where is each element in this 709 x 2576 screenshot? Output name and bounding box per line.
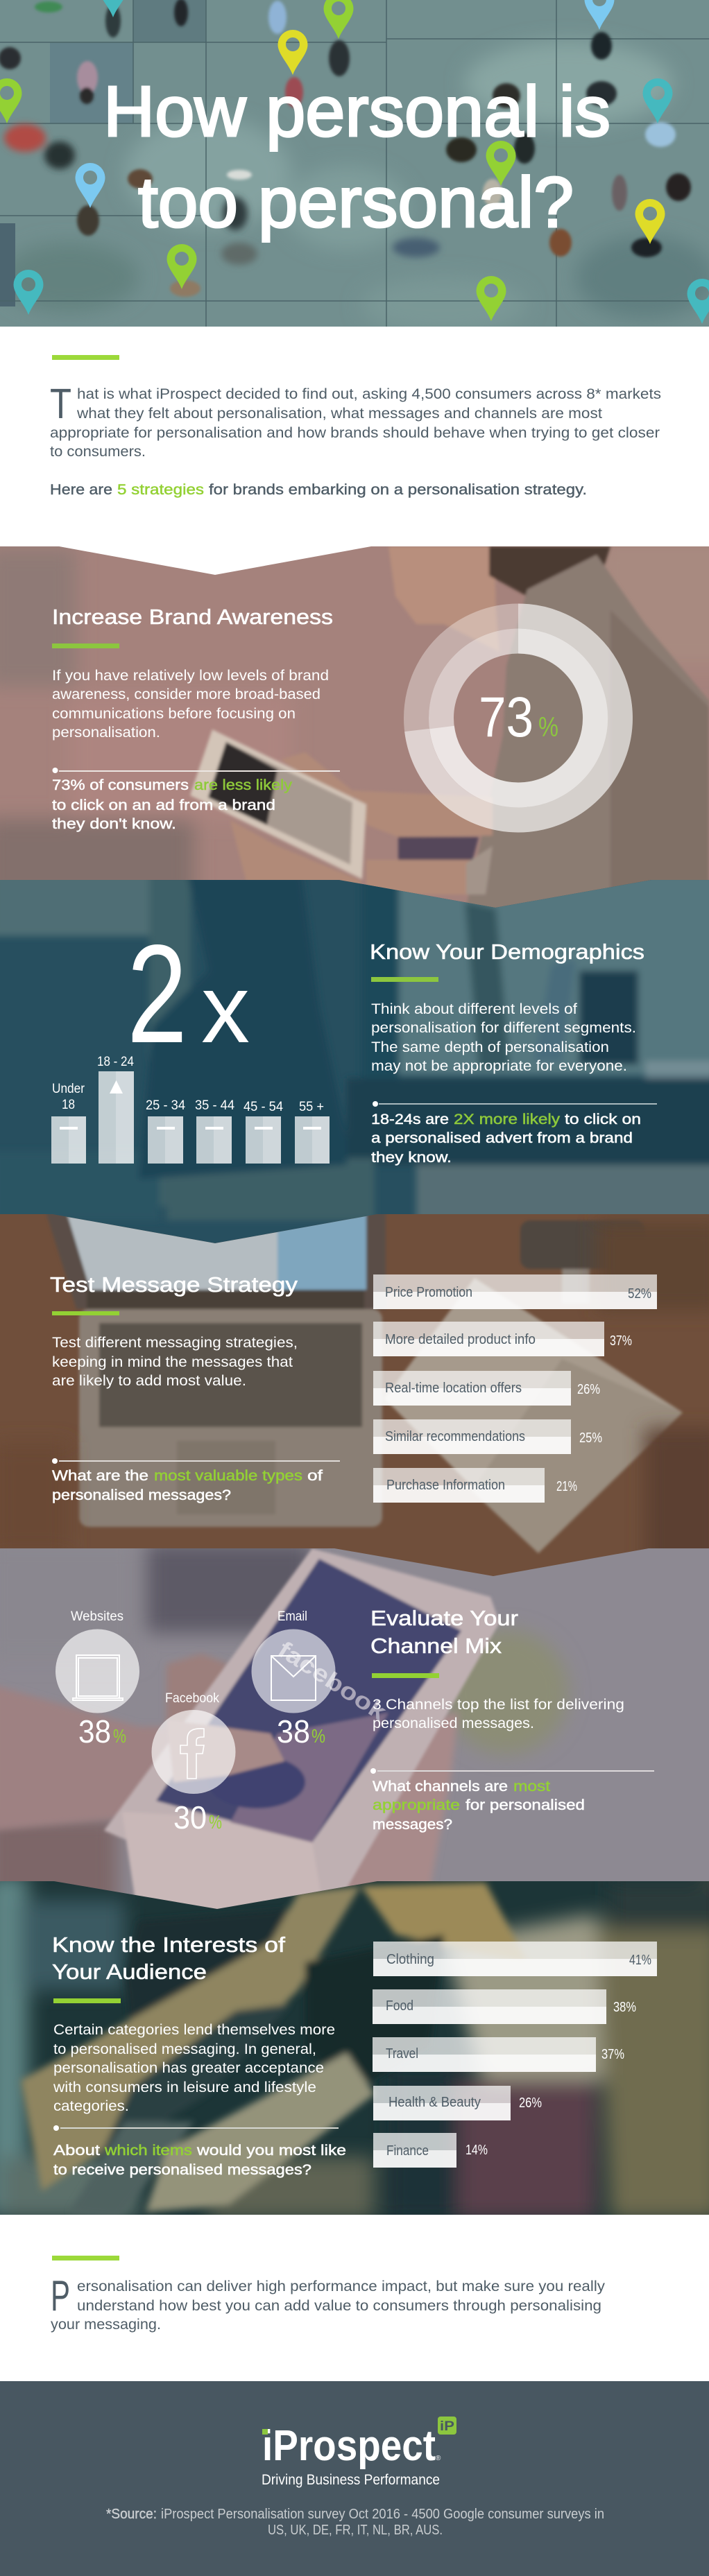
bar: similar recommendations: 25% (579, 1430, 602, 1446)
conclusion paragraph: P (51, 2272, 70, 2320)
bar: finance: 14% (465, 2143, 488, 2158)
bar: 25-34 (146, 1098, 185, 1164)
bar: product info (373, 1322, 632, 1356)
body text: may not be appropriate for everyone. (371, 1057, 627, 1074)
body text: personalisation for different segments. (371, 1019, 636, 1036)
donut chart 73%: 73 (479, 686, 533, 749)
strategies line (50, 481, 587, 498)
big 2x stat: 2 (127, 915, 187, 1072)
panel: know the interests of your audience (0, 1872, 709, 2219)
bar: location offers (373, 1371, 600, 1406)
photo: hand holding phone: facebook (273, 1636, 391, 1726)
panel: introduction (50, 355, 661, 498)
conclusion paragraph: understand how best you can add value to consumers through personalising (77, 2297, 601, 2314)
bar: price promotion: 52% (628, 1286, 651, 1302)
panel: test message strategy (0, 1210, 709, 1595)
body text: are likely to add most value. (52, 1372, 246, 1389)
source note: US, UK, DE, FR, IT, NL, BR, AUS. (268, 2523, 443, 2538)
bar: travel: Travel (386, 2046, 418, 2061)
question text: most (513, 1778, 550, 1795)
bar: purchase information (373, 1468, 577, 1503)
heading: Channel Mix (370, 1634, 502, 1658)
question text: messages? (373, 1816, 452, 1833)
source note: iProspect Personalisation survey Oct 2016 - 4500 Google consumer surveys in (161, 2507, 604, 2522)
panel: increase brand awareness (0, 541, 709, 929)
heading (370, 1606, 518, 1658)
question text: What channels are (373, 1778, 508, 1795)
donut chart 73%: % (538, 712, 558, 743)
bar: under 18: Under (52, 1082, 85, 1096)
body text: awareness, consider more broad-based (52, 686, 321, 702)
donut chart 73% (416, 616, 620, 820)
question text: for personalised (465, 1797, 585, 1813)
heading: Know the Interests of (52, 1933, 285, 1957)
bar chart: interest categories (373, 1942, 657, 2168)
intro paragraph: appropriate for personalisation and how brands should behave when trying to get closer (50, 424, 660, 441)
bar: location offers: Real-time location offers (385, 1381, 522, 1396)
bar: food (373, 1989, 636, 2024)
big 2x stat: x (201, 954, 250, 1063)
panel: evaluate your channel mix (0, 1543, 709, 1928)
body text (52, 667, 329, 741)
body text: If you have relatively low levels of brand (52, 667, 329, 684)
intro paragraph: T (50, 380, 71, 427)
heading: Test Message Strategy (50, 1272, 298, 1297)
body text: personalisation. (52, 724, 160, 741)
icon: iP badge (438, 2417, 456, 2435)
bar: 35-44: 35 - 44 (195, 1098, 234, 1113)
bar: 55+ (295, 1100, 330, 1164)
bar: purchase information: 21% (556, 1479, 577, 1494)
question text: appropriate (373, 1797, 460, 1813)
body text: categories. (53, 2098, 129, 2114)
accent bar (52, 1311, 119, 1315)
channel stat: email: Email (277, 1609, 307, 1624)
body text: to personalised messaging. In general, (53, 2041, 316, 2057)
divider with dot (53, 768, 340, 773)
channel stat: email: 38 (277, 1713, 310, 1749)
question text: About (53, 2142, 100, 2159)
body text: communications before focusing on (52, 705, 296, 722)
body text: with consumers in leisure and lifestyle (53, 2079, 316, 2095)
big 2x stat (127, 915, 250, 1072)
strategies line: Here are (50, 481, 112, 498)
bar: under 18: 18 (62, 1098, 75, 1112)
accent bar (371, 977, 438, 982)
channel stat: email: % (311, 1725, 325, 1747)
source note (106, 2507, 604, 2538)
channel stat: facebook (151, 1691, 236, 1835)
footer background (0, 2381, 709, 2576)
bar: travel: 37% (601, 2047, 624, 2062)
bar: 45-54 (244, 1100, 283, 1164)
body text (373, 1696, 624, 1731)
panel: hero (0, 0, 709, 333)
question text: most valuable types (154, 1467, 302, 1484)
source note: *Source: (106, 2507, 157, 2522)
age bar chart (51, 1055, 330, 1164)
strategies line: 5 strategies (117, 481, 204, 498)
bar: health and beauty: Health & Beauty (388, 2095, 481, 2110)
heading: Know Your Demographics (370, 940, 644, 964)
heading (52, 1933, 285, 1984)
divider with dot (53, 2125, 339, 2131)
bar: price promotion (373, 1274, 657, 1309)
divider with dot (52, 1458, 340, 1464)
icon: envelope (251, 1630, 336, 1713)
divider with dot (370, 1768, 654, 1774)
key stat text: a personalised advert from a brand (371, 1130, 633, 1146)
bar: food: 38% (613, 2000, 636, 2015)
bar: 45-54: 45 - 54 (244, 1100, 283, 1114)
bar: clothing: 41% (629, 1953, 651, 1968)
icon: facebook f (151, 1710, 236, 1794)
key stat text (371, 1111, 641, 1166)
bar: 55+: 55 + (299, 1100, 324, 1114)
photo: hand holding phone (0, 1543, 709, 1928)
bar: clothing (373, 1942, 657, 1976)
question text (53, 2142, 346, 2178)
channel stat: websites: Websites (71, 1609, 123, 1624)
photo: laptop on wooden desk (0, 1210, 709, 1595)
map pins (0, 0, 709, 324)
body text (371, 1001, 636, 1074)
accent bar (53, 1998, 121, 2003)
body text: Test different messaging strategies, (52, 1334, 298, 1351)
bar: finance (373, 2133, 488, 2168)
heading: Evaluate Your (370, 1606, 518, 1630)
photo: person at desk, teal overlay (0, 874, 709, 1262)
bar: purchase information: Purchase Information (386, 1478, 505, 1493)
intro paragraph: to consumers. (50, 443, 146, 460)
bar: health and beauty (373, 2086, 542, 2120)
body text: keeping in mind the messages that (52, 1354, 293, 1370)
body text: personalisation has greater acceptance (53, 2059, 324, 2076)
key stat text: are less likely (194, 777, 292, 793)
channel stat: websites: 38 (78, 1713, 111, 1749)
bar: 18-24 (97, 1055, 134, 1164)
bar: 25-34: 25 - 34 (146, 1098, 185, 1113)
question text: which items (104, 2142, 192, 2159)
accent bar (372, 1673, 439, 1678)
bar: product info: More detailed product info (385, 1332, 536, 1347)
key stat text: 18-24s are (371, 1111, 449, 1127)
heading: Your Audience (52, 1960, 207, 1984)
channel stat: email (251, 1609, 336, 1749)
intro paragraph: what they felt about personalisation, what messages and channels are most (76, 405, 602, 422)
key stat text: 73% of consumers (52, 777, 189, 793)
iProspect logo: iProspect (262, 2422, 436, 2470)
body text (53, 2021, 335, 2114)
bar: clothing: Clothing (386, 1952, 434, 1967)
intro paragraph (50, 380, 661, 460)
bar chart: message types (373, 1274, 657, 1503)
bar: finance: Finance (386, 2143, 429, 2159)
heading: Increase Brand Awareness (52, 605, 333, 629)
intro paragraph: hat is what iProspect decided to find out, asking 4,500 consumers across 8* markets (77, 386, 661, 402)
channel stat: facebook: 30 (173, 1799, 207, 1835)
question text: of (307, 1467, 323, 1484)
body text: The same depth of personalisation (371, 1039, 609, 1055)
conclusion paragraph: ersonalisation can deliver high performance impact, but make sure you really (77, 2278, 605, 2294)
bar: 18-24: 18 - 24 (97, 1055, 134, 1069)
question text: personalised messages? (52, 1487, 231, 1503)
question text: to receive personalised messages? (53, 2161, 311, 2178)
panel: footer (0, 2381, 709, 2576)
bar: health and beauty: 26% (519, 2095, 542, 2111)
conclusion paragraph: your messaging. (51, 2316, 161, 2333)
icon: iP badge: iP (440, 2419, 454, 2434)
body text (52, 1334, 298, 1389)
photo: clothes on hangers (0, 1872, 709, 2219)
accent bar (52, 2256, 119, 2261)
photo: woman with tablet (0, 541, 709, 929)
bar: location offers: 26% (577, 1382, 600, 1397)
divider with dot (373, 1101, 657, 1107)
bar: similar recommendations (373, 1419, 602, 1454)
bar: similar recommendations: Similar recommendations (385, 1429, 525, 1444)
bar: price promotion: Price Promotion (385, 1285, 472, 1300)
body text: personalised messages. (373, 1715, 534, 1731)
key stat text: to click on (565, 1111, 641, 1127)
question text: What are the (52, 1467, 148, 1484)
question text: would you most like (196, 2142, 346, 2159)
key stat text (52, 777, 292, 832)
body text: Think about different levels of (371, 1001, 577, 1017)
panel: know your demographics (0, 874, 709, 1262)
title (103, 71, 610, 242)
title: too personal? (138, 162, 574, 242)
iProspect logo: ® (436, 2455, 441, 2462)
accent bar (52, 643, 119, 648)
bar: food: Food (386, 1998, 413, 2014)
hero photo: crowd from above (0, 0, 709, 333)
conclusion paragraph (51, 2272, 605, 2333)
bar: product info: 37% (610, 1333, 632, 1349)
channel stat: websites (55, 1609, 139, 1749)
title: How personal is (103, 71, 610, 151)
body text: Certain categories lend themselves more (53, 2021, 335, 2038)
body text: 3 Channels top the list for delivering (373, 1696, 624, 1713)
accent bar (52, 355, 119, 360)
bar: under 18 (51, 1082, 86, 1164)
key stat text: they don't know. (52, 815, 176, 832)
bar: 35-44 (195, 1098, 234, 1164)
icon: laptop (55, 1630, 139, 1713)
question text (373, 1778, 585, 1833)
strategies line: for brands embarking on a personalisation strategy. (209, 481, 587, 498)
channel stat: facebook: Facebook (165, 1691, 219, 1706)
bar: travel (373, 2037, 624, 2072)
channel stat: facebook: % (209, 1811, 222, 1833)
question text (52, 1467, 323, 1503)
panel: conclusion (51, 2256, 605, 2333)
channel stat: websites: % (113, 1725, 126, 1747)
key stat text: to click on an ad from a brand (52, 797, 275, 813)
tagline: Driving Business Performance (262, 2471, 440, 2488)
key stat text: they know. (371, 1149, 452, 1166)
key stat text: 2X more likely (454, 1111, 560, 1127)
